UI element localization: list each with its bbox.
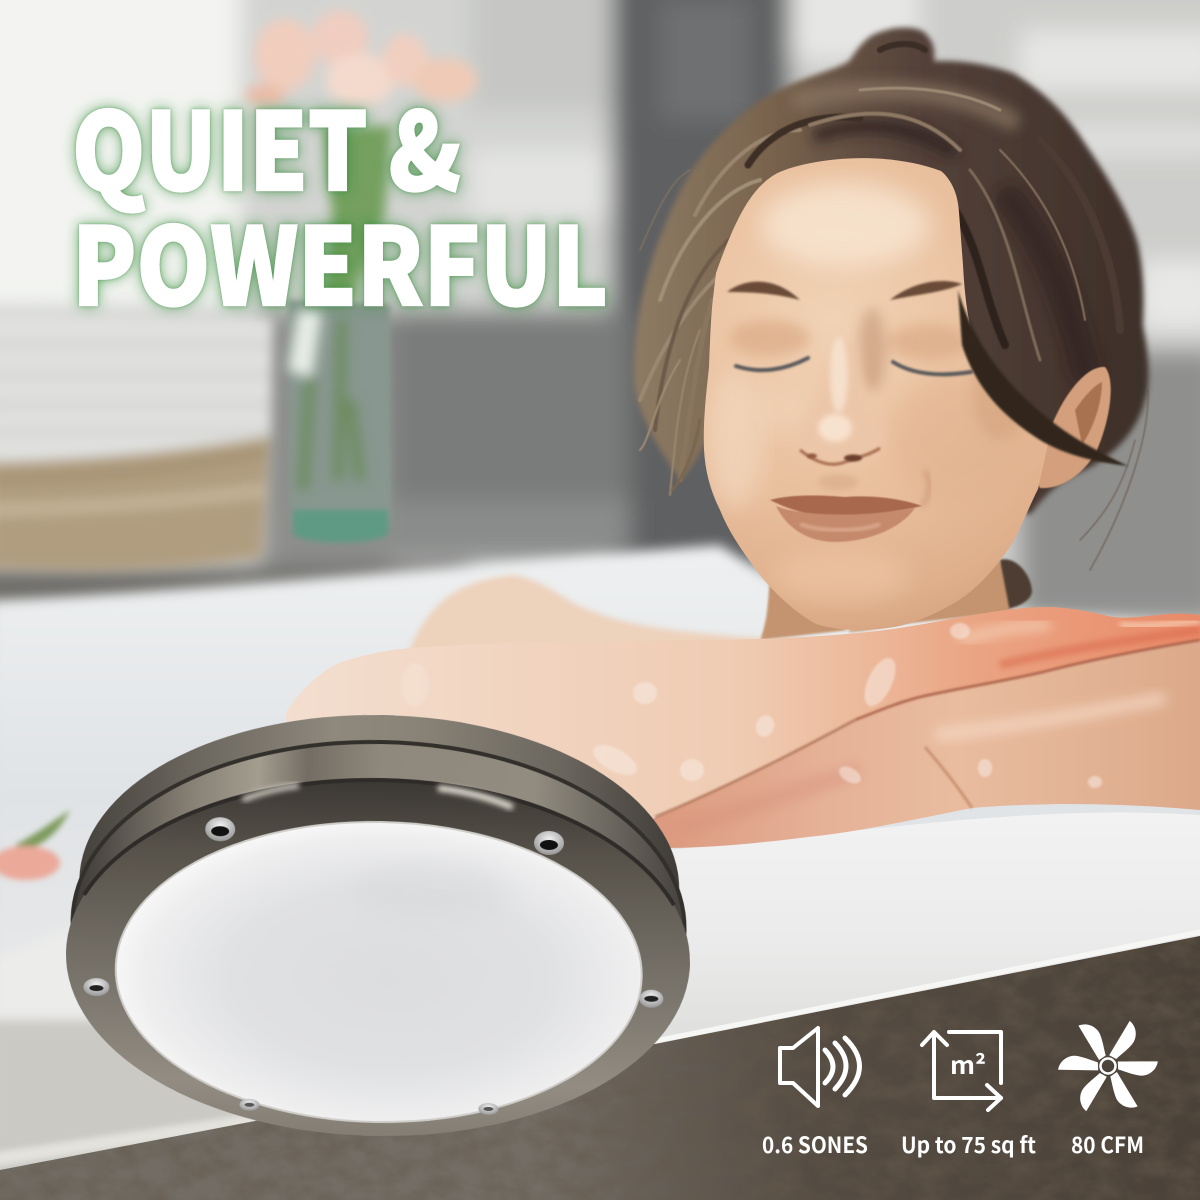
woman: face — [690, 140, 1128, 640]
nose — [796, 337, 885, 466]
spec: room coverage — [901, 1032, 1036, 1160]
label: sones: 0.6 SONES — [762, 1128, 868, 1160]
woman: ear — [1037, 367, 1111, 488]
basket — [0, 312, 272, 570]
middle band — [69, 737, 688, 1113]
hair strands — [640, 44, 1148, 570]
label: cfm: 80 CFM — [1071, 1128, 1144, 1160]
shoulder — [405, 575, 761, 665]
spec: noise level — [762, 1028, 868, 1160]
screws — [81, 815, 666, 1118]
icon: six blade fan — [1058, 1018, 1159, 1114]
woman: neck — [760, 560, 1010, 640]
spec: airflow — [1058, 1018, 1159, 1160]
stone tub surround — [0, 930, 1200, 1200]
back plate — [76, 710, 682, 1060]
woman: hair — [634, 28, 1149, 610]
title: POWERFUL — [72, 181, 608, 336]
product: round ceiling fan light fixture — [63, 710, 694, 1141]
icon: speaker with sound waves — [780, 1028, 860, 1106]
eyebrows — [727, 281, 962, 300]
blurred flower on tub — [0, 810, 70, 880]
frosted glass lens — [113, 817, 644, 1127]
title — [72, 66, 608, 336]
lips — [770, 495, 922, 542]
closed eyes — [736, 358, 971, 374]
hair highlights — [800, 90, 1085, 370]
front ring — [63, 775, 693, 1141]
icon: square metre area arrows — [922, 1032, 1001, 1110]
arm resting on tub: upper arm and hand — [286, 607, 1200, 860]
icon text: m2: m² — [950, 1046, 986, 1081]
fringe over ear — [958, 290, 1128, 466]
flowers and vase — [245, 10, 477, 542]
label: coverage: Up to 75 sq ft — [901, 1128, 1036, 1160]
highlights — [84, 775, 676, 905]
arm resting on tub: lower forearm and hand — [650, 640, 1200, 848]
low hair bun — [990, 559, 1032, 610]
title: QUIET & — [72, 66, 461, 221]
water droplets on skin — [401, 623, 1102, 788]
bathtub — [0, 545, 1200, 1170]
